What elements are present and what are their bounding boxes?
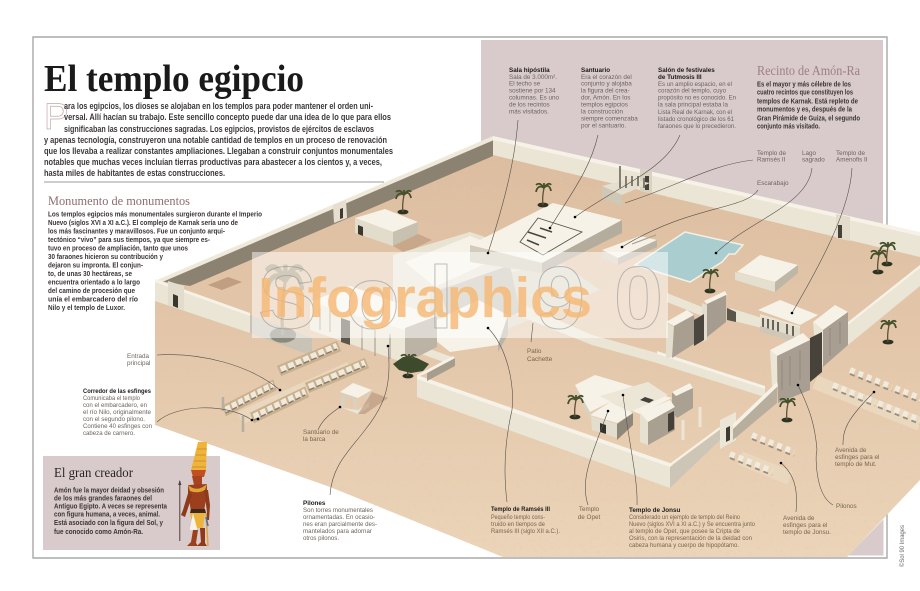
- label: Corredor de las esfinges: con el segundo pilono.: [83, 416, 145, 423]
- label: Santuario de la barca: Santuario de: [303, 429, 339, 436]
- label: Corredor de las esfinges: Comunicaba el templo: [83, 395, 140, 402]
- right wall: [848, 265, 920, 345]
- tall palm inside the first court: [266, 265, 302, 343]
- illustration: temple precinct: [155, 136, 920, 557]
- label: Templo de Amenofis II: Templo de: [836, 150, 866, 157]
- small column hall: [602, 166, 650, 206]
- label: Patio Cachette: Cachette: [527, 356, 553, 363]
- panel: Recinto de Amón-Ra background: [481, 40, 883, 236]
- label: Santuario: Santuario: [581, 67, 610, 74]
- label: Templo de Jonsu: Templo de Jonsu: [629, 507, 680, 514]
- label: Santuario: conjunto y alojaba: [581, 80, 632, 88]
- text block: Monumento de monumentos: unía el embarcadero del río: [48, 294, 138, 304]
- label: Corredor de las esfinges: cabeza de carnero.: [83, 430, 135, 437]
- label: Pilones: otros pilonos.: [303, 535, 339, 542]
- first pylon: [310, 286, 437, 363]
- text block: Recinto de Amón-Ra: Gran Pirámide de Guiza, el segundo: [757, 114, 860, 122]
- palm trees: [393, 183, 896, 422]
- intro text block: significaban las construcciones sagradas. Los egipcios, provistos de ejércitos de esclavos: [64, 124, 374, 134]
- intro text block: ara los egipcios, los dioses se alojaban en los templos para poder mantener el orden uni-: [64, 101, 373, 111]
- text block: Monumento de monumentos: del camino de procesión que: [48, 286, 135, 295]
- label: Lago sagrado: [802, 150, 825, 164]
- label: Templo de Jonsu: [629, 507, 755, 549]
- label: Santuario de la barca: la barca: [303, 436, 326, 443]
- label: Corredor de las esfinges: [83, 388, 152, 437]
- label: Templo de Opet: [578, 506, 600, 521]
- text block: Recinto de Amón-Ra: Es el mayor y más célebre de los: [757, 80, 851, 88]
- label: Pilones: [303, 500, 377, 542]
- label: Lago sagrado: sagrado: [802, 156, 825, 164]
- label: Patio Cachette: [527, 348, 553, 363]
- label: Sala hipóstila: Sala hipóstila: [509, 67, 550, 74]
- label: Santuario: [581, 67, 638, 130]
- label: Avenida de esfinges para el templo de Mut: templo de Mut.: [835, 461, 877, 468]
- intro text block: notables que muchas veces incluían tierras productivas para abastecer a los cientos y, a veces,: [44, 157, 382, 167]
- front wall: Opet corner: [417, 375, 778, 488]
- left front wall: [155, 279, 312, 356]
- label: Templo de Jonsu: al templo de Opet, que posee la Cripta de: [629, 528, 740, 535]
- label: Santuario: la figura del crea-: [581, 88, 630, 94]
- small storage building: [355, 209, 432, 253]
- label: Templo de Jonsu: cabeza humana y cuerpo de hipopótamo.: [629, 542, 739, 549]
- label: Sala hipóstila: más visitados.: [509, 108, 549, 116]
- watermark: Sol 90: [258, 248, 663, 347]
- watermark: Infographics: [258, 266, 592, 330]
- Jonsu temple: [575, 375, 700, 445]
- label: Templo de Jonsu: Nuevo (siglos XVI a XI a.C.) y Se encuentra junto: [629, 521, 755, 528]
- text block: Monumento de monumentos: Nilo y el templo de Luxor.: [48, 303, 125, 312]
- label: Templo de Amenofis II: [836, 150, 868, 164]
- body text: [54, 486, 168, 536]
- body text: con figura humana, a veces, animal.: [54, 510, 160, 518]
- label: Templo de Ramsés II: Templo de: [757, 150, 787, 157]
- label: Salón de festivales de Tutmosis III: propósito no es conocido. En: [658, 94, 736, 102]
- label: Templo de Ramsés III: Ramsés III (siglo XII a.C.).: [491, 528, 560, 535]
- label: Corredor de las esfinges: el río Nilo, originalmente: [83, 409, 151, 416]
- label: Salón de festivales de Tutmosis III: Salón de festivales: [658, 67, 715, 74]
- body text: Antiguo Egipto. A veces se representa: [54, 502, 168, 510]
- label: Patio Cachette: Patio: [527, 348, 542, 355]
- label: Pilones: mantelados para adornar: [303, 528, 372, 535]
- label: Salón de festivales de Tutmosis III: la sala principal estaba la: [658, 102, 728, 108]
- label: Avenida de esfinges para el templo de Jonsu: esfinges para el: [783, 522, 827, 529]
- label: Santuario: por el santuario.: [581, 122, 626, 130]
- ground: [155, 137, 920, 557]
- title: El templo egipcio: [44, 58, 304, 100]
- corner wall by entrance: [413, 343, 455, 381]
- label: Sala hipóstila: Sala de 3.000m².: [509, 74, 557, 81]
- label: Templo de Jonsu: Considerado un ejemplo de templo del Reino: [629, 514, 740, 521]
- back shadows on ground: [208, 277, 242, 290]
- intro text block: que los llevaba a realizar constantes ampliaciones. Llegaban a construir conjuntos monumentales: [44, 146, 393, 156]
- label: Santuario: la construcción: [581, 108, 623, 116]
- label: Templo de Ramsés III: Pequeño templo cons-: [491, 514, 545, 521]
- label: Sala hipóstila: de los recintos: [509, 102, 550, 108]
- temple complex: courts: [393, 232, 657, 363]
- intro text block: y apenas tecnología, construyeron una notable cantidad de templos en un proceso de renovación: [44, 135, 387, 145]
- label: Pilonos: Pilonos: [836, 503, 857, 510]
- label: Santuario: Era el corazón del: [581, 74, 632, 81]
- text block: Monumento de monumentos: tuvo en proceso de ampliación, tanto que unos: [48, 244, 188, 252]
- credit: ©Sol 90 Images: [899, 525, 906, 567]
- label: Santuario: siempre comenzaba: [581, 116, 638, 122]
- back-left wall: [157, 136, 494, 286]
- label: Salón de festivales de Tutmosis III: Es un amplio espacio, en el: [658, 81, 732, 88]
- label: Salón de festivales de Tutmosis III: faraones que lo precedieron.: [658, 123, 736, 130]
- text block: Monumento de monumentos: dejaron su impronta. El conjun-: [48, 260, 143, 270]
- text block: Monumento de monumentos: encuentra orientado a lo largo: [48, 278, 140, 286]
- text block: Monumento de monumentos: to, de unas 30 hectáreas, se: [48, 269, 132, 278]
- label: Salón de festivales de Tutmosis III: Lista Real de Karnak, con el: [658, 109, 732, 116]
- text block: Monumento de monumentos: Nuevo (siglos XVI a XI a.C.). El complejo de Karnak sería uno de: [48, 218, 238, 227]
- intro text block: hasta miles de habitantes de estas construcciones.: [44, 168, 225, 178]
- corner triangle: [847, 518, 884, 556]
- label: Entrada principal: Entrada: [127, 353, 150, 360]
- label: Salón de festivales de Tutmosis III: listado cronológico de los 61: [658, 116, 734, 123]
- sacred lake: [635, 232, 743, 282]
- palm tree behind the storage building: [396, 190, 411, 214]
- text block: Recinto de Amón-Ra: conjunto más visitado.: [757, 122, 820, 130]
- Amenofis II temple: [758, 300, 818, 344]
- label: Templo de Ramsés II: [757, 150, 787, 164]
- text block: Recinto de Amón-Ra: templos de Karnak. Está repleto de: [757, 96, 858, 106]
- label: Sala hipóstila: El techo se: [509, 80, 541, 88]
- label: Templo de Amenofis II: Amenofis II: [836, 156, 868, 164]
- text block: Recinto de Amón-Ra: cuatro recintos que constituyen los: [757, 88, 853, 96]
- text block: Monumento de monumentos: tectónico “vivo” para sus tiempos, ya que siempre es-: [48, 235, 210, 244]
- label: Escarabajo: Escarabajo: [757, 180, 789, 187]
- label: Templo de Opet: Templo: [579, 506, 600, 513]
- label: Entrada principal: principal: [127, 360, 150, 367]
- drop cap: P: [44, 96, 69, 137]
- label: Santuario: templos egipcios: [581, 102, 628, 108]
- intro text block: [44, 96, 393, 178]
- intro text block: versal. Allí hacían su trabajo. Este sencillo concepto puede dar una idea de lo que para ellos: [64, 112, 391, 122]
- label: Lago sagrado: Lago: [802, 150, 817, 157]
- label: Templo de Ramsés III: truido en tiempos de: [491, 521, 545, 528]
- label: Templo de Ramsés II: Ramsés II: [757, 156, 786, 164]
- panel: El gran creador: [43, 442, 220, 550]
- rear pylon: [666, 291, 736, 358]
- label: Avenida de esfinges para el templo de Mut: Avenida de: [835, 447, 867, 454]
- text block: Monumento de monumentos: los más fascinantes y maravillosos. Fue un conjunto arqui-: [48, 226, 225, 236]
- heading: Monumento de monumentos: Monumento de monumentos: [48, 193, 190, 208]
- text block: Recinto de Amón-Ra: monumentos y es, después de la: [757, 104, 853, 114]
- body text: fue conocido como Amón-Ra.: [54, 527, 143, 536]
- label: Santuario: dor, Amón. En los: [581, 94, 630, 102]
- label: Templo de Jonsu: Osiris, con la representación de la deidad con: [629, 535, 752, 542]
- text block: Monumento de monumentos: Los templos egipcios más monumentales surgieron durante el Imperio: [48, 210, 262, 218]
- body text: Amón fue la mayor deidad y obsesión: [54, 486, 164, 494]
- label: Avenida de esfinges para el templo de Mut: esfinges para el: [835, 454, 879, 461]
- label: Sala hipóstila: sostiene por 134: [509, 88, 556, 94]
- main sanctuary: [470, 203, 622, 273]
- label: Salón de festivales de Tutmosis III: [658, 67, 736, 130]
- label: Templo de Opet: de Opet: [578, 514, 600, 521]
- label: Corredor de las esfinges: con el embarcadero, en: [83, 402, 147, 409]
- body text: Está asociado con la figura del Sol, y: [54, 518, 164, 527]
- label: Pilones: nes eran parcialmente des-: [303, 521, 377, 528]
- text block: Monumento de monumentos: [48, 210, 262, 312]
- label: Santuario de la barca: [303, 429, 339, 443]
- label: Corredor de las esfinges: Contiene 40 esfinges con: [83, 423, 152, 430]
- body text: de los más grandes faraones del: [54, 494, 152, 502]
- label: Avenida de esfinges para el templo de Jonsu: [783, 515, 831, 536]
- label: Salón de festivales de Tutmosis III: de Tutmosis III: [658, 74, 702, 81]
- label: Sala hipóstila: columnas. Es uno: [509, 94, 560, 102]
- label: Pilones: Son torres monumentales: [303, 507, 373, 514]
- label: Templo de Ramsés III: Templo de Ramsés III: [491, 506, 550, 513]
- front pylon: [770, 305, 848, 403]
- label: Pilones: ornamentadas. En ocasio-: [303, 514, 375, 521]
- box building by the lake: [735, 255, 798, 292]
- heading: Recinto de Amón-Ra: Recinto de Amón-Ra: [757, 64, 861, 79]
- sphinx avenues: [223, 346, 920, 478]
- label: Sala hipóstila: [509, 67, 560, 116]
- label: Avenida de esfinges para el templo de Jonsu: templo de Jonsu.: [783, 529, 831, 536]
- barque shrine: [340, 383, 388, 414]
- label: Templo de Ramsés III: [491, 506, 560, 535]
- label: Entrada principal: [127, 353, 150, 367]
- label: Avenida de esfinges para el templo de Jonsu: Avenida de: [783, 515, 815, 522]
- leader lines: [157, 120, 875, 512]
- text block: Monumento de monumentos: 30 faraones hicieron su contribución y: [48, 252, 164, 261]
- label: Salón de festivales de Tutmosis III: corazón del templo, cuyo: [658, 88, 726, 94]
- icon: Amun figure: [178, 442, 210, 546]
- heading: El gran creador: [54, 466, 133, 481]
- inner precinct walls: [657, 293, 765, 397]
- label: Avenida de esfinges para el templo de Mut: [835, 447, 879, 468]
- text block: Recinto de Amón-Ra: [757, 80, 860, 130]
- Ramsés II hall: [602, 235, 657, 265]
- back-right wall: [493, 136, 920, 257]
- label: Pilones: Pilones: [303, 500, 326, 507]
- label: Corredor de las esfinges: Corredor de las esfinges: [83, 388, 151, 395]
